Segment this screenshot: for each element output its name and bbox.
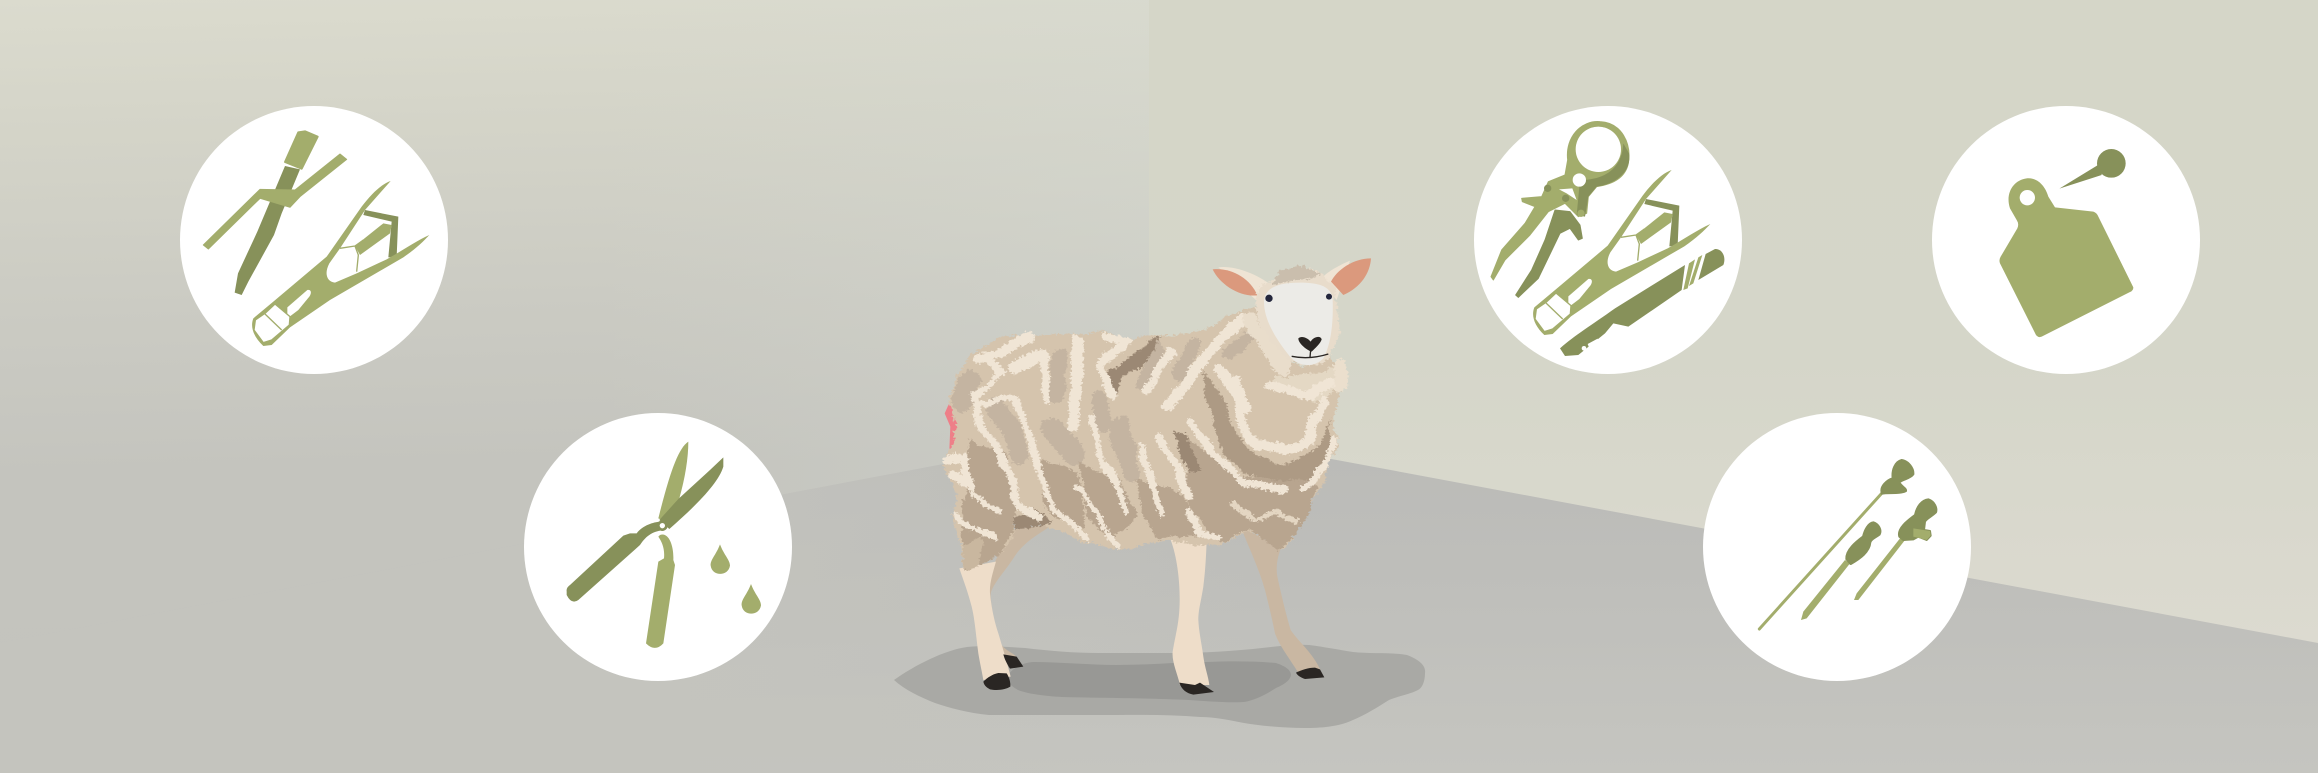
ear left bbox=[1213, 269, 1257, 296]
tool: dark shaft bbox=[235, 166, 300, 295]
rear hip light patch bbox=[962, 540, 983, 568]
long needle bbox=[1759, 460, 1913, 629]
tool: top handle bbox=[285, 131, 318, 169]
ear right bbox=[1331, 258, 1371, 295]
shears dark handle bbox=[567, 522, 665, 602]
red shearing wound mark bbox=[945, 404, 964, 450]
tag hole bbox=[2020, 190, 2035, 205]
tool: elastrator clamp bbox=[252, 181, 429, 346]
icon circle: shears and blood drops bbox=[524, 413, 792, 681]
hooves bbox=[983, 654, 1324, 695]
icon circle: ear tag and pin bbox=[1932, 106, 2200, 374]
background: floor bbox=[0, 425, 2318, 773]
shears light blade bbox=[658, 442, 688, 522]
near front leg bbox=[1171, 540, 1209, 685]
forehead tuft bbox=[1272, 265, 1321, 285]
far rear leg bbox=[983, 523, 1055, 661]
mouth bbox=[1292, 350, 1328, 358]
blood drop two bbox=[742, 584, 761, 614]
background: floor left tint bbox=[0, 425, 1250, 773]
medium needle bbox=[1801, 523, 1880, 620]
dark tan collar band bbox=[1202, 372, 1330, 482]
nose bbox=[1298, 337, 1322, 352]
icon circle: hypodermic needles bbox=[1703, 413, 1971, 681]
near rear leg bbox=[959, 562, 1011, 680]
shears pivot bbox=[657, 520, 668, 531]
head bbox=[1264, 265, 1333, 365]
elastrator clamp bbox=[1533, 170, 1710, 335]
blood drop one bbox=[711, 544, 730, 574]
scalpel bbox=[1560, 249, 1724, 356]
icon circle: punch pliers, elastrator and scalpel bbox=[1474, 106, 1742, 374]
taupe upper patches bbox=[963, 337, 1247, 473]
eye left bbox=[1265, 295, 1273, 302]
shears light handle bbox=[646, 534, 675, 648]
tool: cross bar bbox=[203, 154, 347, 249]
sheep ground shadow bbox=[894, 645, 1425, 728]
sheep bbox=[945, 258, 1371, 695]
eye right bbox=[1326, 294, 1332, 300]
face bbox=[1264, 283, 1333, 365]
wool cream strands bbox=[948, 318, 1340, 547]
fleece base bbox=[945, 303, 1347, 570]
icon circle: emasculator and elastrator tools bbox=[180, 106, 448, 374]
ear right backing bbox=[1320, 261, 1350, 300]
shears dark blade bbox=[659, 457, 723, 529]
ear left backing bbox=[1218, 267, 1277, 303]
ear tag bbox=[1999, 178, 2133, 337]
punch pliers bbox=[1491, 122, 1629, 297]
far front leg bbox=[1241, 527, 1321, 673]
tag pin bbox=[2059, 149, 2126, 189]
background: right wall bbox=[1149, 0, 2318, 773]
dark wool creases bbox=[1013, 336, 1200, 530]
head cream surround bbox=[1254, 269, 1337, 367]
wool fleece bbox=[945, 269, 1347, 570]
inner contact shadow bbox=[1007, 661, 1291, 702]
lower body tan patches bbox=[963, 437, 1320, 570]
short needle bbox=[1854, 499, 1936, 600]
light cream chest bbox=[1275, 367, 1343, 399]
background: left wall corner light bbox=[600, 0, 1149, 530]
background: left wall bbox=[0, 0, 1149, 773]
